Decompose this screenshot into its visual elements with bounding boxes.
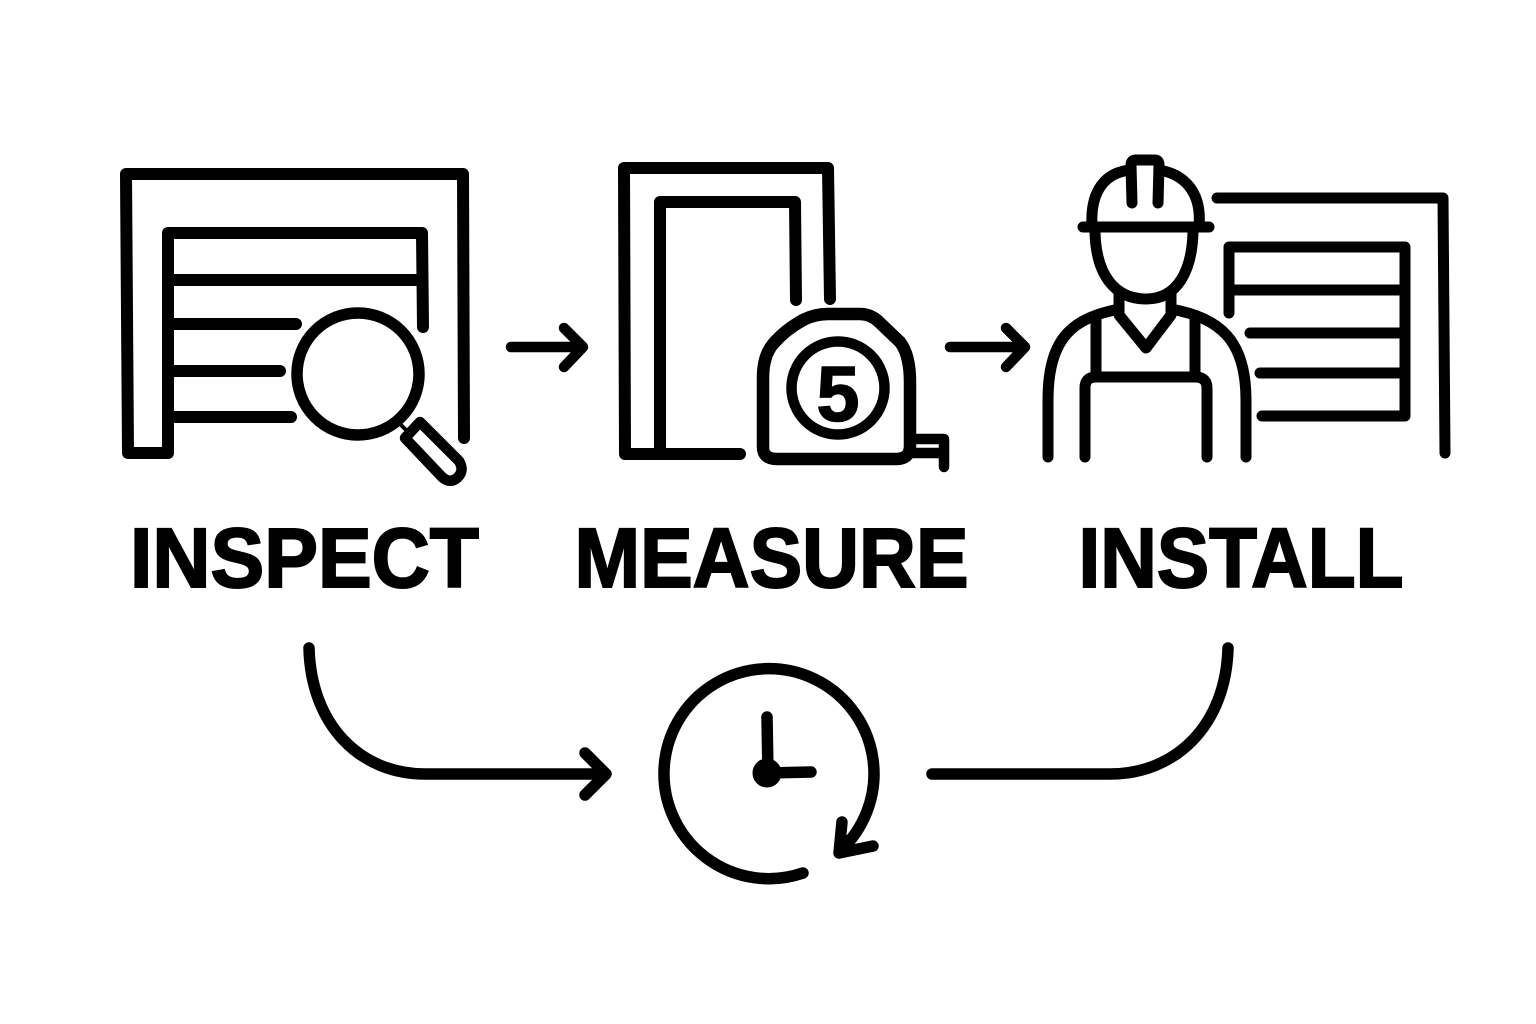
arrow: inspect to measure: [511, 328, 583, 367]
heading: measure: MEASURE: [574, 511, 968, 605]
tape measure number: 5: [816, 350, 860, 438]
icon: installer worker with garage door: [1048, 160, 1445, 457]
icon: clock with circular arrow: [664, 669, 874, 879]
door frame: [624, 168, 830, 454]
garage door: [1217, 198, 1445, 453]
connector: curved line from install to clock: [932, 648, 1228, 774]
tape measure: [763, 314, 944, 467]
heading: install: INSTALL: [1078, 511, 1404, 605]
icon: door opening with tape measure: [624, 168, 944, 467]
arrow: measure to install: [950, 328, 1025, 367]
heading: inspect: INSPECT: [130, 511, 479, 605]
clock centre: [758, 764, 776, 782]
overalls and shoulders: [1048, 309, 1246, 457]
arrow: curved from inspect to clock: [309, 648, 606, 795]
clock hands: [767, 717, 811, 773]
icon: garage door with magnifying glass: [126, 174, 464, 481]
garage outer frame: [126, 174, 464, 453]
head and neck: [1095, 232, 1193, 348]
hard hat: [1083, 160, 1209, 227]
door slats: [168, 280, 422, 417]
magnifying glass: [297, 313, 462, 481]
